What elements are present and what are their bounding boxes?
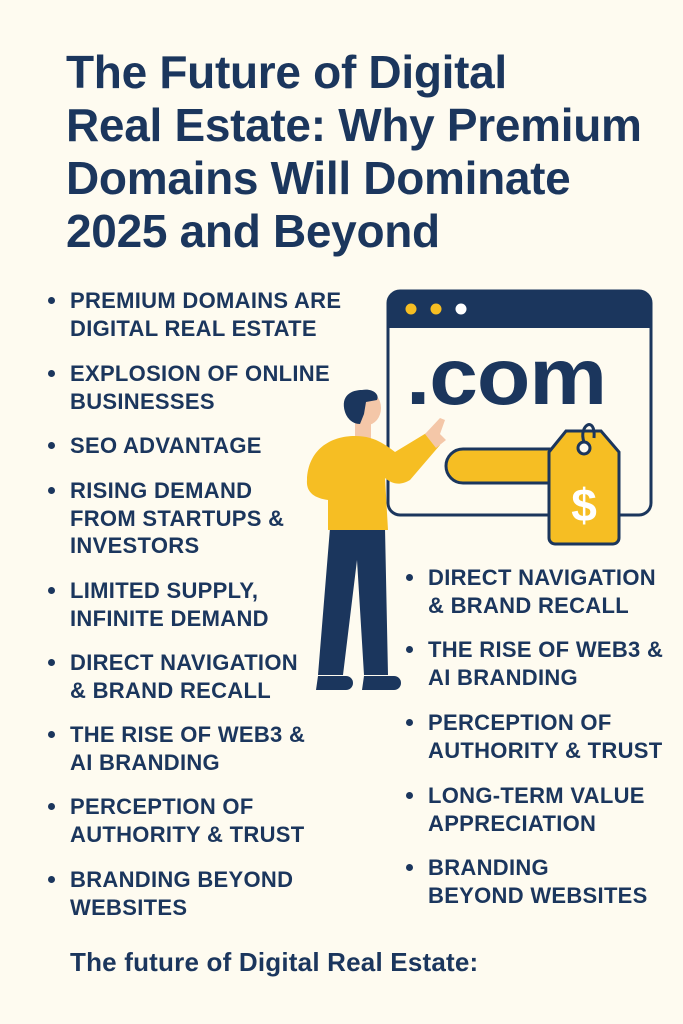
item: THE RISE OF WEB3 &: [70, 722, 305, 747]
item: [70, 721, 305, 776]
item: BEYOND WEBSITES: [428, 882, 648, 908]
item: [70, 649, 298, 704]
item: [70, 866, 293, 921]
item: [428, 782, 645, 837]
person pointing: [307, 390, 446, 690]
item: [428, 709, 662, 764]
left column list: [48, 288, 341, 920]
item: DIGITAL REAL ESTATE: [70, 316, 317, 340]
item: AUTHORITY & TRUST: [428, 738, 662, 762]
item: & BRAND RECALL: [70, 678, 271, 702]
item: FROM STARTUPS &: [70, 506, 284, 530]
item: LIMITED SUPPLY,: [70, 578, 258, 603]
item: AI BRANDING: [70, 750, 220, 774]
icon: price tag: [549, 425, 619, 544]
item: [428, 854, 648, 909]
title: The Future of Digital: [66, 46, 507, 98]
item: APPRECIATION: [428, 810, 596, 836]
item: BRANDING: [428, 855, 549, 880]
title: [66, 46, 642, 257]
item: [428, 636, 663, 691]
item: [70, 360, 330, 415]
item: WEBSITES: [70, 894, 187, 920]
item: THE RISE OF WEB3 &: [428, 637, 663, 662]
title: Domains Will Dominate: [66, 152, 570, 204]
item: [70, 477, 284, 560]
item: RISING DEMAND: [70, 478, 252, 503]
item: [70, 577, 269, 632]
item: PERCEPTION OF: [70, 794, 254, 819]
item: PREMIUM DOMAINS ARE: [70, 288, 341, 313]
footer text: The future of Digital Real Estate:: [70, 947, 478, 977]
item: [428, 564, 656, 619]
icon: price tag: $: [571, 479, 597, 531]
browser window: [388, 291, 651, 515]
item: DIRECT NAVIGATION: [70, 650, 298, 675]
item: INVESTORS: [70, 533, 199, 558]
item: DIRECT NAVIGATION: [428, 565, 656, 590]
item: & BRAND RECALL: [428, 592, 629, 618]
item: AI BRANDING: [428, 664, 578, 690]
item: LONG-TERM VALUE: [428, 783, 645, 808]
item: AUTHORITY & TRUST: [70, 822, 304, 846]
item: [70, 287, 341, 342]
item: EXPLOSION OF ONLINE: [70, 361, 330, 386]
item: SEO ADVANTAGE: [70, 433, 262, 458]
right column list: [406, 565, 663, 908]
title: Real Estate: Why Premium: [66, 99, 642, 151]
title: 2025 and Beyond: [66, 205, 440, 257]
item: INFINITE DEMAND: [70, 606, 269, 630]
item: BRANDING BEYOND: [70, 867, 293, 892]
item: PERCEPTION OF: [428, 710, 612, 735]
browser window: .com: [406, 332, 606, 421]
item: [70, 793, 304, 848]
item: BUSINESSES: [70, 388, 215, 414]
